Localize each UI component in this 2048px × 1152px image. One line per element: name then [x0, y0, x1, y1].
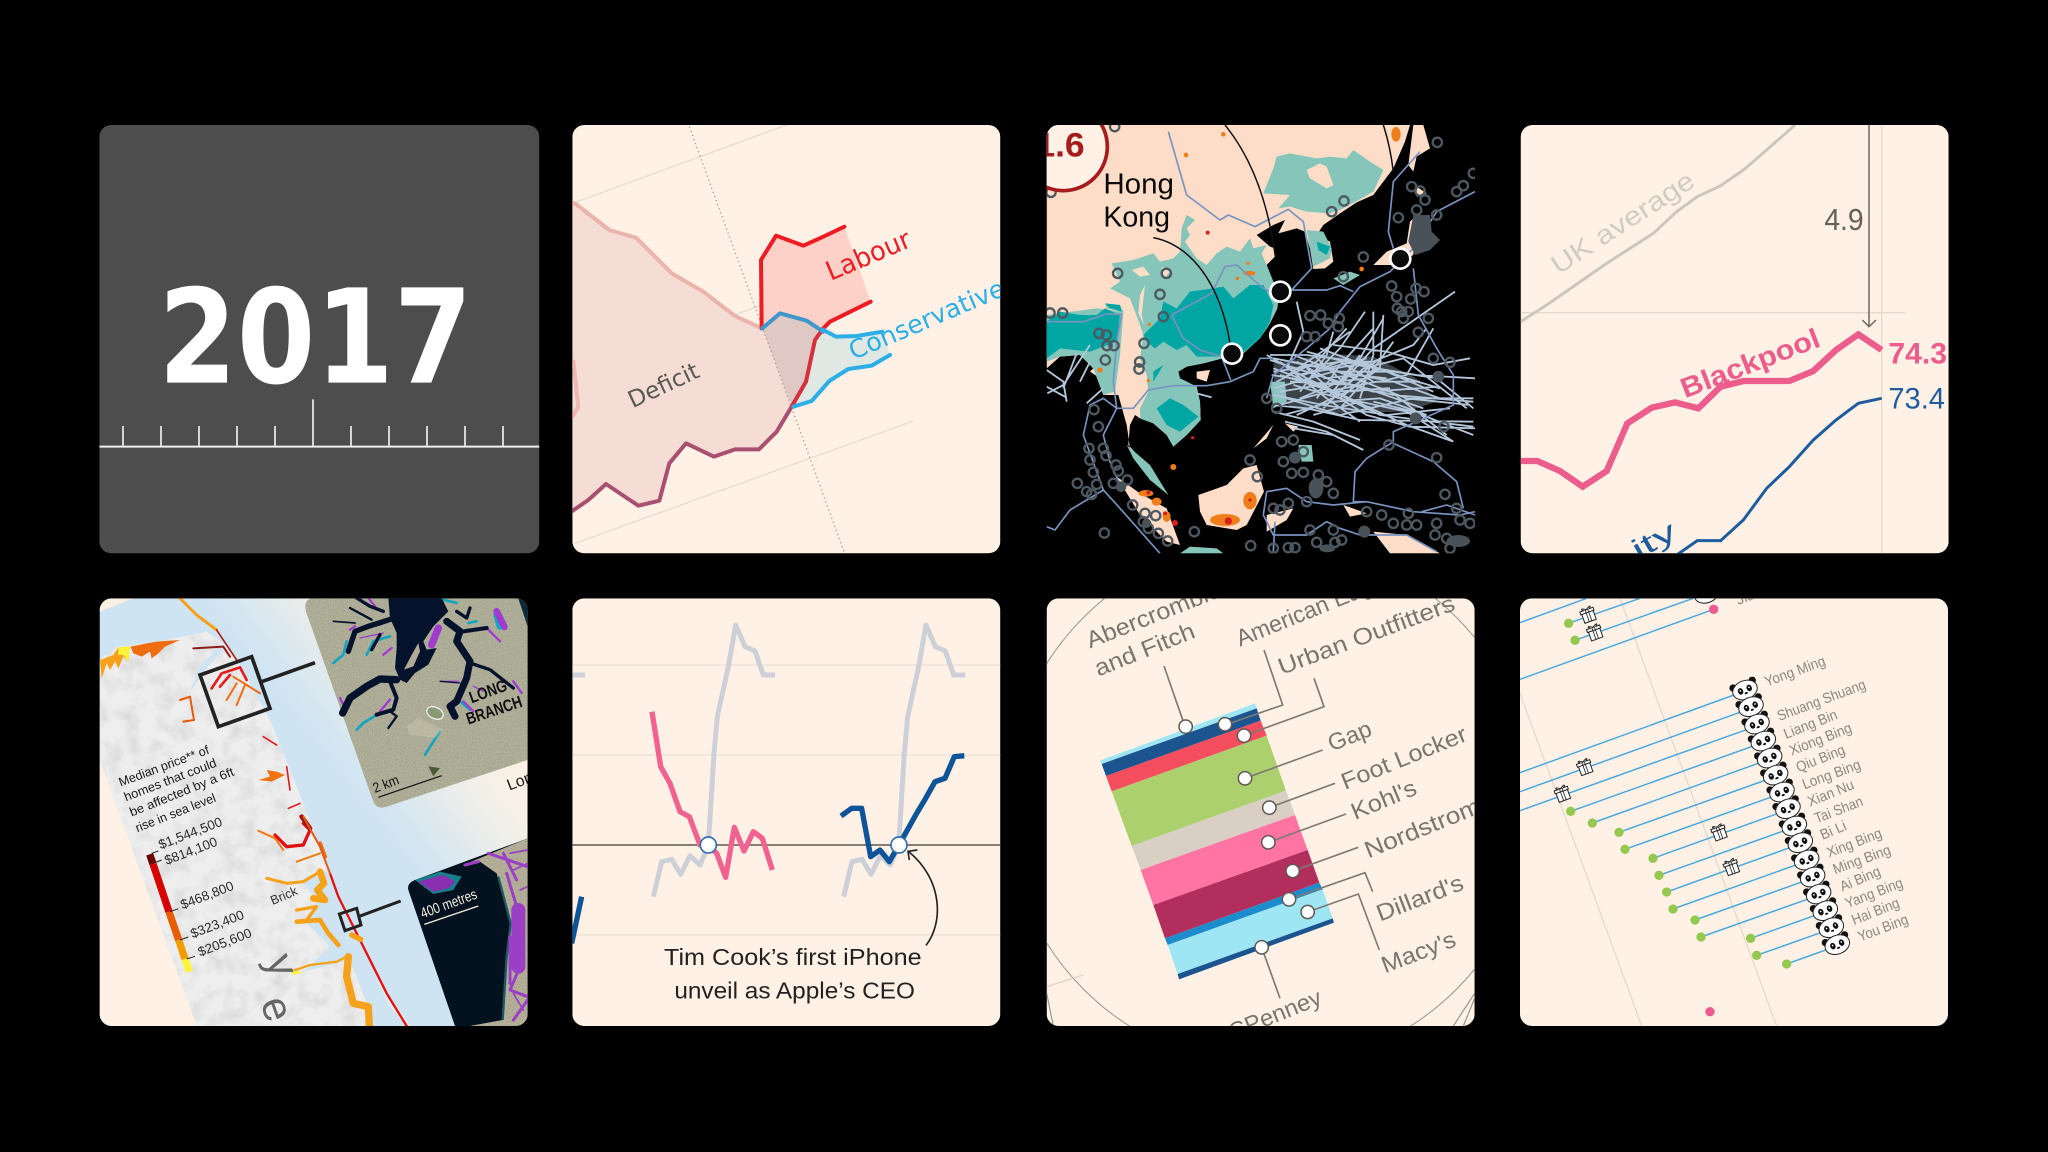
tectonic plate boundaries [1047, 132, 1475, 553]
panda names: Hai Bing [1850, 896, 1902, 929]
value: 74.3: 74.3 [1888, 337, 1947, 370]
panda names: Bi Li [1818, 818, 1849, 844]
panda names: Xing Bing [1825, 826, 1884, 861]
pink markers [1705, 605, 1718, 1016]
typhoon core [1273, 353, 1437, 413]
volcano rings [1045, 122, 1478, 553]
legend: median price: homes that could [122, 756, 219, 804]
panda names: Liang Bin [1782, 707, 1840, 743]
legend: median price: Median price** of [117, 743, 211, 789]
rank badge [1046, 125, 1110, 192]
deficit line [572, 203, 792, 511]
leader lines [1153, 125, 1393, 343]
stacked bar segments [1100, 703, 1334, 979]
panda names: Tai Shan [1812, 794, 1865, 827]
panel: giant panda timeline [1520, 579, 1948, 1026]
map label: Long fragment: Long [505, 766, 544, 794]
annotation text: Tim Cook’s first iPhone [664, 944, 922, 970]
panda names: Ai Bing [1838, 864, 1883, 895]
panda names: Ming Bing [1831, 842, 1893, 878]
overlap area [763, 316, 819, 404]
retailer labels: JCPenney [1213, 984, 1326, 1049]
label: 4.9: 4.9 [1824, 203, 1864, 237]
retailer labels: Abercrombie [1082, 576, 1225, 653]
legend: median price: $205,600 [196, 925, 254, 959]
labour line [761, 227, 871, 407]
flood risk: creeks and river [180, 598, 407, 1026]
event markers [700, 837, 907, 853]
flood risk: peach breaks [1132, 267, 1170, 325]
panda icons [1690, 579, 1854, 959]
label: Labour: Labour [821, 224, 916, 287]
map label: state name letters: e [252, 990, 304, 1028]
gap arrow [1862, 125, 1876, 327]
label: Hong Kong: Kong [1103, 202, 1170, 234]
label: UK average: UK average [1545, 165, 1700, 280]
legend: median price [117, 743, 254, 972]
Blackpool line [1521, 334, 1882, 487]
panda names: Jia [1734, 587, 1758, 609]
map label: state name letters [252, 947, 309, 1028]
labour area [761, 227, 871, 328]
map label: Brick: Brick [268, 884, 300, 908]
panel: life expectancy line chart [1521, 125, 1949, 565]
flood risk: northern bay fringe [100, 640, 285, 782]
annotation text: unveil as Apple’s CEO [674, 977, 915, 1003]
panda names: Qiu Bing [1794, 742, 1848, 776]
blue line fragment [572, 897, 582, 943]
retailer labels: Nordstrom [1360, 793, 1485, 863]
volcano clusters [1116, 215, 1470, 552]
annotation text [664, 944, 922, 1003]
legend: median price: $1,544,500 [156, 814, 224, 852]
retailer labels: Dillard's [1372, 869, 1467, 926]
legend: median price: $814,100 [162, 834, 219, 868]
legend: median price: $468,800 [178, 878, 236, 912]
gift icons [1553, 605, 1741, 876]
hazard specks [1097, 127, 1401, 526]
retailer labels: Urban Outfitters [1274, 590, 1458, 680]
label: Conservative: Conservative [844, 273, 1009, 366]
retailer labels: Kohl's [1347, 774, 1420, 825]
blue city line [1677, 398, 1882, 555]
panda names [1734, 587, 1911, 945]
legend: median price: $323,400 [188, 907, 246, 941]
legend: median price: be affected by a 6ft [128, 765, 236, 819]
bay water [303, 870, 407, 1026]
deficit area [572, 203, 792, 511]
panel: iPhone unveil stock chart [572, 598, 1000, 1026]
inset: Long Branch satellite: LONG [467, 676, 510, 707]
value: 73.4: 73.4 [1888, 382, 1945, 415]
inlets traced [333, 598, 522, 776]
land base [100, 632, 410, 1026]
rank badge: 1.6 [1035, 127, 1085, 165]
legend: median price: rise in sea level [133, 791, 218, 835]
connector lines [1164, 650, 1379, 998]
retailer labels: Gap [1324, 715, 1375, 756]
inset: Long Branch satellite: 2 km [370, 771, 401, 796]
annotation arrow [908, 850, 937, 945]
panel: retailer stacked bar [1007, 540, 1533, 1067]
panda names: Yang Bing [1843, 875, 1905, 912]
panda names: You Bing [1856, 912, 1911, 945]
UK average line [1521, 125, 1795, 322]
flood risk: dark teal [1047, 242, 1330, 432]
city markers [1222, 249, 1410, 364]
panel: Asia risk map [1046, 125, 1475, 554]
flood risk: yellow tip [290, 970, 303, 975]
map label: state name letters: y [257, 947, 309, 983]
year heading: 2017 [158, 262, 472, 414]
timeline ruler [99, 399, 539, 447]
grey comparison lines [572, 625, 965, 897]
label: Blackpool: Blackpool [1676, 322, 1824, 404]
inset: dark satellite: 400 metres [419, 887, 479, 922]
label: Deficit: Deficit [623, 357, 703, 414]
panel: sea level map [100, 598, 544, 1028]
conservative area [793, 332, 890, 407]
flood risk: light teal [1047, 150, 1383, 553]
panda names: Xiong Bing [1787, 720, 1854, 759]
panda names: Long Bing [1800, 757, 1863, 793]
panda names: Shuang Shuang [1775, 677, 1868, 725]
typhoon tracks [1047, 292, 1475, 450]
locator box: small [339, 901, 401, 931]
panel: deficit area chart [572, 125, 1009, 553]
locator box: Long Branch [200, 657, 315, 727]
land masses [1047, 125, 1440, 553]
inset: Long Branch satellite [305, 598, 528, 808]
inset: dark satellite [408, 838, 528, 1026]
retailer labels: Macy's [1377, 926, 1459, 978]
label: Hong Kong: Hong [1103, 168, 1174, 200]
label: Hong Kong [1106, 174, 1172, 232]
panel: 2017 year card [99, 125, 539, 553]
retailer labels: and Fitch [1090, 617, 1198, 681]
start dots [1564, 619, 1791, 969]
connector nodes [1179, 718, 1314, 954]
retailer labels: Foot Locker [1337, 720, 1471, 795]
conservative line [762, 313, 890, 407]
label: city fragment: ity [1626, 515, 1682, 565]
pink line [652, 712, 772, 877]
timeline lines [1520, 598, 1828, 964]
inset: Long Branch satellite: BRANCH [464, 692, 525, 728]
retailer labels: American Eagle [1232, 566, 1393, 651]
retailer labels [1082, 566, 1485, 1049]
blue line [841, 756, 964, 862]
flood risk: southern bays [267, 872, 369, 1026]
panda names: Yong Ming [1763, 654, 1828, 690]
panda names: Xian Nu [1806, 777, 1857, 810]
